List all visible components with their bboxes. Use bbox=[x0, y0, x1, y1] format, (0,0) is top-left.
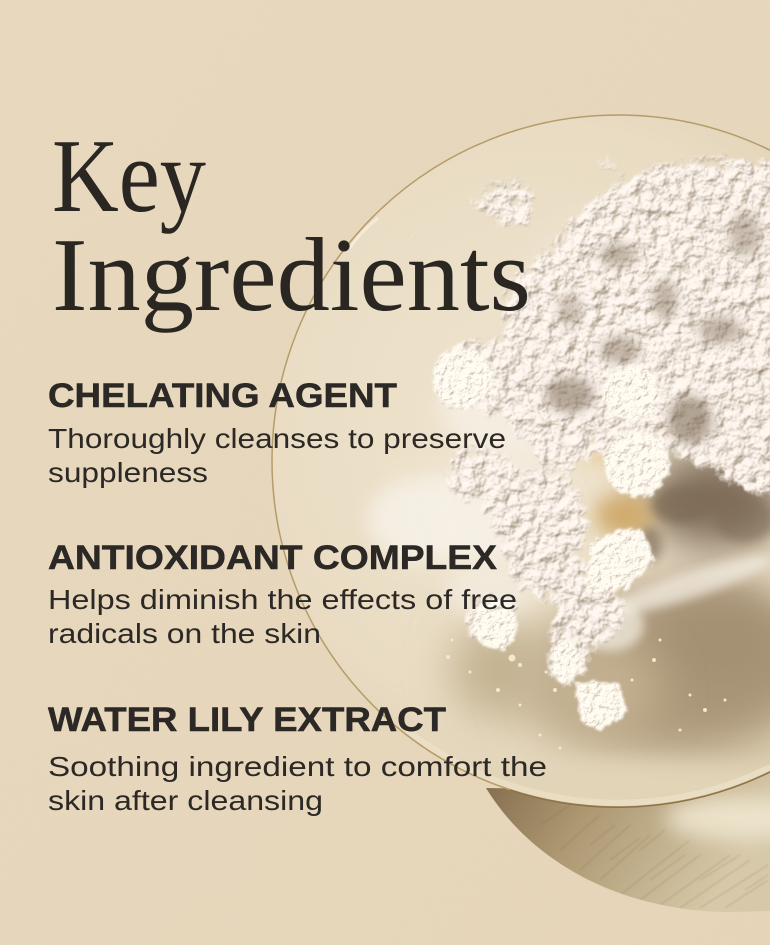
liquid shadow bbox=[434, 431, 770, 768]
ingredient: antioxidant complex bbox=[48, 539, 517, 649]
ingredient: water lily extract: WATER LILY EXTRACT bbox=[48, 701, 446, 739]
ingredient: water lily extract bbox=[48, 701, 547, 816]
ingredient: chelating agent: Thoroughly cleanses to preserve bbox=[48, 423, 506, 454]
ingredient: chelating agent bbox=[48, 377, 506, 488]
title: Key bbox=[52, 117, 206, 234]
dish rim bbox=[272, 115, 770, 807]
dish shadow bbox=[486, 760, 770, 912]
ingredient: antioxidant complex: Helps diminish the effects of free bbox=[48, 584, 517, 615]
powder clumps bbox=[432, 348, 670, 732]
dish contents bbox=[368, 146, 770, 805]
ingredient: chelating agent: CHELATING AGENT bbox=[48, 377, 397, 415]
ingredient: antioxidant complex: radicals on the skin bbox=[48, 618, 321, 649]
glass dish bbox=[272, 115, 770, 807]
ingredient: water lily extract: Soothing ingredient to comfort the bbox=[48, 751, 547, 782]
title: Ingredients bbox=[52, 216, 531, 333]
floating flecks bbox=[446, 638, 726, 750]
powder recess shadows bbox=[546, 213, 770, 563]
ingredient: antioxidant complex: ANTIOXIDANT COMPLEX bbox=[48, 539, 497, 577]
ingredient: water lily extract: skin after cleansing bbox=[48, 785, 323, 816]
powder mass bbox=[400, 146, 770, 683]
soft powder haze bbox=[368, 210, 770, 651]
ingredient: chelating agent: suppleness bbox=[48, 457, 208, 488]
title bbox=[52, 117, 531, 333]
